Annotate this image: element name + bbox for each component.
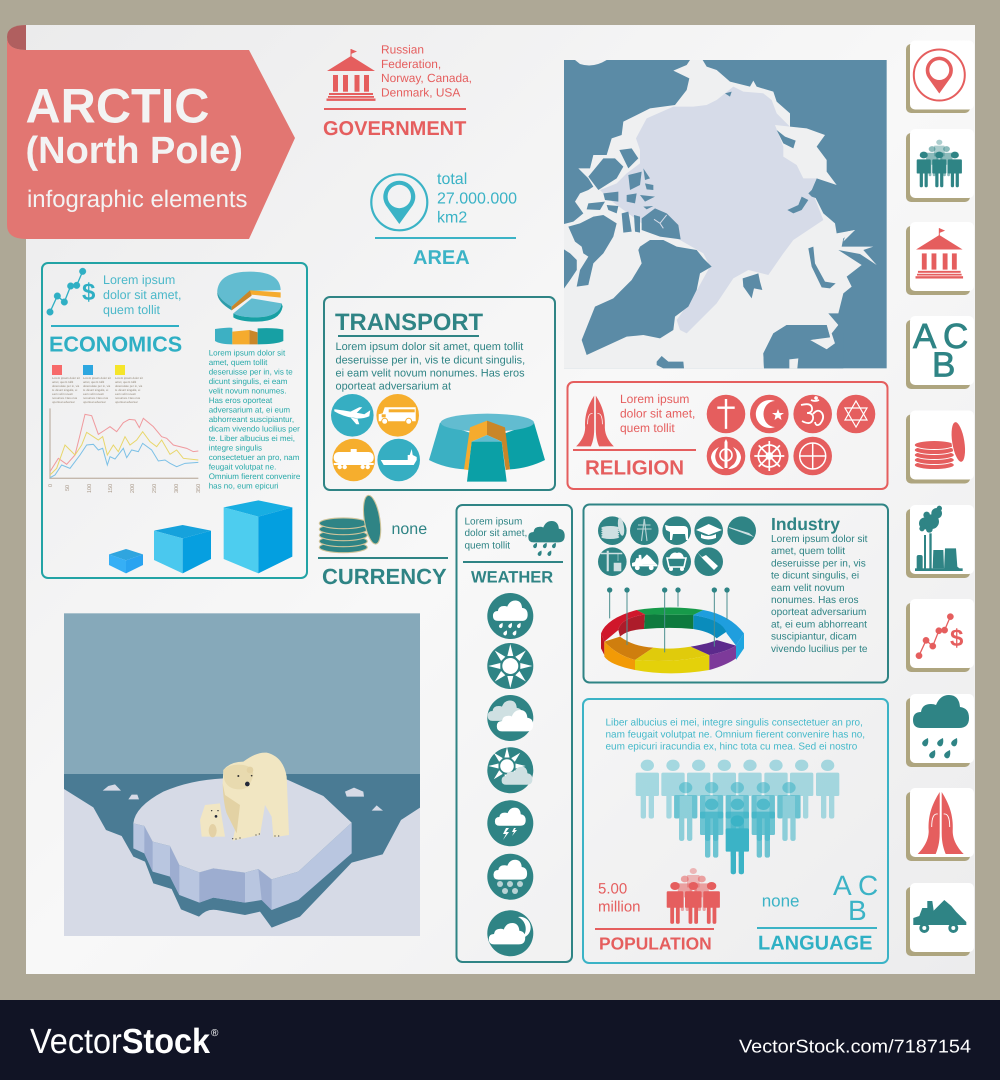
icon: coins bbox=[319, 494, 384, 553]
industry text: at, ei eum abhorreant bbox=[771, 620, 867, 630]
chart x-axis ticks: 300 bbox=[174, 484, 180, 493]
icon: language letters: C bbox=[858, 870, 878, 901]
chart legend: te dicunt singulis, ei bbox=[52, 388, 78, 392]
icon: rain bbox=[487, 593, 533, 639]
icon: rain cloud bbox=[528, 521, 565, 556]
transport text bbox=[336, 341, 525, 392]
area value bbox=[437, 171, 517, 227]
transport text: ei eam velit novum nonumes. Has eros bbox=[336, 367, 525, 379]
icon: hands tile bbox=[918, 792, 964, 854]
population text: eum epicuri iracundia ex, hinc tota cu mea. Sed ei nostro bbox=[606, 741, 858, 752]
image id: VectorStock.com/7187154 bbox=[739, 1036, 971, 1057]
title ribbon: (North Pole) bbox=[26, 130, 243, 172]
weather text: quem tollit bbox=[464, 540, 510, 551]
weather text bbox=[464, 516, 527, 551]
icon: rain tile bbox=[913, 695, 969, 758]
title ribbon: ARCTIC bbox=[26, 80, 209, 134]
icon: crane bbox=[598, 547, 627, 576]
population value: million bbox=[598, 899, 641, 916]
chart legend: eam velit novum bbox=[115, 392, 137, 396]
population value bbox=[598, 880, 641, 916]
chart x-axis ticks: 0 bbox=[48, 484, 54, 487]
economics body text: abhorreant suscipiantur, bbox=[209, 415, 294, 424]
tile shadows bbox=[906, 44, 970, 956]
icon: red crowd bbox=[667, 868, 720, 924]
chart legend: eam velit novum bbox=[83, 392, 105, 396]
economics body text: integre singulis bbox=[209, 444, 262, 453]
icon: bus bbox=[376, 394, 419, 437]
chart legend: deseruisse per in, vis bbox=[115, 384, 143, 388]
chart legend: nonumes. Has eros bbox=[115, 396, 141, 400]
area value: km2 bbox=[437, 210, 467, 227]
icon: letters tile: B bbox=[932, 346, 955, 385]
3d cubes bbox=[109, 500, 292, 573]
heading: religion: RELIGION bbox=[585, 456, 684, 479]
religion text bbox=[620, 392, 695, 435]
industry text: amet, quem tollit bbox=[771, 546, 845, 557]
icon: language letters bbox=[833, 870, 878, 926]
icon: tank wagon bbox=[332, 439, 375, 481]
economics body text: Has eros oporteat bbox=[209, 396, 273, 405]
tile faces bbox=[910, 40, 974, 952]
title ribbon: infographic elements bbox=[27, 186, 248, 213]
chart legend: Lorem ipsum dolor sit bbox=[52, 376, 80, 380]
heading: language: LANGUAGE bbox=[758, 932, 872, 954]
chart legend: Lorem ipsum dolor sit bbox=[83, 376, 111, 380]
heading: transport: TRANSPORT bbox=[335, 309, 484, 336]
industry text: vivendo lucilius per te bbox=[771, 644, 868, 655]
chart legend: eam velit novum bbox=[52, 392, 74, 396]
chart x-axis ticks: 50 bbox=[65, 485, 71, 491]
industry text: suscipiantur, dicam bbox=[771, 632, 857, 642]
icon: ship bbox=[377, 439, 420, 481]
economics body text: Lorem ipsum dolor sit bbox=[209, 349, 286, 358]
government countries text: Denmark, USA bbox=[381, 86, 460, 100]
economics body text: velit novum nonumes. bbox=[209, 387, 287, 396]
icon: growth tile: $ bbox=[950, 625, 964, 652]
icon: letters tile bbox=[913, 317, 968, 385]
icon: coins small bbox=[598, 516, 627, 545]
economics body text: te. Liber albucius ei mei, bbox=[209, 434, 295, 443]
panel: economics bbox=[42, 263, 307, 578]
side icon tiles bbox=[906, 40, 974, 956]
chart legend: oporteat adversar bbox=[52, 400, 75, 404]
government countries text: Russian bbox=[381, 42, 424, 56]
economics body text: dicunt singulis, ei eam bbox=[209, 377, 288, 386]
icon: people tile bbox=[917, 140, 962, 187]
icon: syringe bbox=[694, 547, 723, 576]
economics body text: adversarium at, ei eum bbox=[209, 406, 290, 415]
chart legend: te dicunt singulis, ei bbox=[83, 388, 109, 392]
economics body text: amet, quem tollit bbox=[209, 358, 268, 367]
industry text: Lorem ipsum dolor sit bbox=[771, 534, 868, 545]
icon: letters tile: C bbox=[943, 317, 968, 356]
chart legend: te dicunt singulis, ei bbox=[115, 388, 141, 392]
chart x-axis ticks bbox=[48, 484, 202, 493]
chart x-axis ticks: 200 bbox=[130, 484, 136, 493]
economics body text: consectetuer an pro, nam bbox=[209, 453, 300, 462]
icon: language letters: A bbox=[833, 870, 852, 901]
heading: government: GOVERNMENT bbox=[323, 118, 466, 140]
chart legend bbox=[52, 365, 143, 404]
brand logo: VectorStock bbox=[30, 1022, 210, 1061]
icon: letters tile: A bbox=[913, 317, 937, 356]
chart x-axis ticks: 350 bbox=[196, 484, 202, 493]
icon: dharma wheel bbox=[750, 437, 789, 475]
chart x-axis ticks: 250 bbox=[152, 484, 158, 493]
government countries text bbox=[381, 42, 472, 100]
economics body text: has no, eum epicuri bbox=[209, 482, 279, 491]
icon: sun bbox=[487, 643, 533, 689]
area value: total bbox=[437, 171, 467, 188]
chart x-axis ticks: 150 bbox=[108, 484, 114, 493]
icon: cow bbox=[662, 516, 691, 545]
area block bbox=[371, 171, 517, 269]
heading: industry: Industry bbox=[771, 514, 840, 534]
icon: truck tile bbox=[913, 900, 966, 933]
population text: Liber albucius ei mei, integre singulis consectetuer an pro, bbox=[606, 717, 863, 728]
icon: growth chart and dollar: $ bbox=[82, 279, 96, 306]
icon: cross bbox=[707, 395, 745, 433]
3d cylinder chart bbox=[429, 414, 545, 482]
polar bear illustration bbox=[64, 613, 420, 936]
language value: none bbox=[762, 892, 800, 911]
economics body text: Omnium fierent convenire bbox=[209, 472, 301, 481]
economics intro text bbox=[103, 273, 182, 317]
icon: polar bear with cub bbox=[200, 753, 289, 841]
economics body text bbox=[209, 349, 301, 491]
icon: rifle bbox=[727, 516, 756, 545]
pie chart bbox=[215, 272, 283, 344]
religion text: quem tollit bbox=[620, 421, 675, 435]
icon: factory tile bbox=[915, 506, 963, 571]
chart legend: nonumes. Has eros bbox=[83, 396, 109, 400]
industry text: eam velit novum bbox=[771, 583, 844, 594]
panel: religion bbox=[568, 382, 888, 489]
chart legend: oporteat adversar bbox=[115, 400, 138, 404]
government countries text: Norway, Canada, bbox=[381, 71, 472, 85]
area value: 27.000.000 bbox=[437, 190, 517, 208]
weather text: dolor sit amet, bbox=[464, 528, 527, 539]
chart legend: deseruisse per in, vis bbox=[52, 384, 80, 388]
transport text: Lorem ipsum dolor sit amet, quem tollit bbox=[336, 341, 523, 353]
icon: dump truck bbox=[630, 547, 659, 576]
icon: area pin bbox=[371, 174, 427, 230]
heading: currency: CURRENCY bbox=[322, 564, 447, 589]
donut chart bbox=[601, 587, 744, 673]
icon: location pin tile bbox=[914, 50, 965, 100]
people pyramid bbox=[636, 760, 839, 874]
icon: graduation cap bbox=[694, 516, 723, 545]
economics intro text: quem tollit bbox=[103, 303, 160, 317]
weather text: Lorem ipsum bbox=[464, 516, 522, 527]
government countries text: Federation, bbox=[381, 57, 441, 71]
industry text: deseruisse per in, vis bbox=[771, 558, 866, 570]
chart legend: oporteat adversar bbox=[83, 400, 106, 404]
chart x-axis ticks: 100 bbox=[87, 484, 93, 493]
economics intro text: dolor sit amet, bbox=[103, 288, 182, 302]
icon: government building bbox=[326, 49, 376, 101]
chart legend: amet, quem tollit bbox=[115, 380, 136, 384]
registered mark: ® bbox=[211, 1028, 219, 1039]
economics body text: feugait volutpat ne. bbox=[209, 463, 276, 472]
religion text: dolor sit amet, bbox=[620, 406, 695, 420]
title ribbon bbox=[7, 25, 295, 239]
economics body text: dicam vivendo lucilius per bbox=[209, 425, 300, 434]
chart legend: nonumes. Has eros bbox=[52, 396, 78, 400]
government block bbox=[323, 42, 472, 140]
heading: population: POPULATION bbox=[599, 933, 712, 953]
line chart bbox=[48, 408, 202, 493]
industry icons bbox=[598, 516, 756, 576]
chart legend: amet, quem tollit bbox=[83, 380, 104, 384]
currency value: none bbox=[392, 521, 427, 538]
icon: growth tile bbox=[916, 613, 964, 659]
icon: plane bbox=[331, 394, 374, 437]
icon: mine cart bbox=[662, 547, 691, 576]
icon: clouds bbox=[487, 695, 533, 741]
economics body text: deseruisse per in, vis te bbox=[209, 368, 293, 377]
heading: economics: ECONOMICS bbox=[49, 332, 182, 357]
bottom brand bar bbox=[0, 1000, 1000, 1080]
icon: khanda bbox=[707, 437, 745, 475]
icon: crescent and star bbox=[750, 395, 789, 433]
icon: moon and cloud bbox=[487, 910, 533, 956]
heading: area: AREA bbox=[413, 247, 470, 269]
chart legend: deseruisse per in, vis bbox=[83, 384, 111, 388]
economics intro text: Lorem ipsum bbox=[103, 273, 175, 287]
arctic map bbox=[564, 60, 887, 368]
icon: coins tile bbox=[914, 421, 968, 470]
population text: nam feugait volutpat ne. Omnium fierent convenire has no, bbox=[606, 729, 865, 740]
panel: weather bbox=[456, 505, 572, 962]
industry text: te dicunt singulis, ei bbox=[771, 570, 859, 582]
icon: sun and cloud bbox=[487, 747, 533, 793]
heading: weather: WEATHER bbox=[471, 568, 553, 586]
chart legend: Lorem ipsum dolor sit bbox=[115, 376, 143, 380]
transport text: oporteat adversarium at bbox=[336, 380, 451, 392]
panel: transport bbox=[324, 297, 555, 490]
icon: snow cloud bbox=[487, 854, 533, 900]
industry text: nonumes. Has eros bbox=[771, 595, 859, 606]
transport text: deseruisse per in, vis te dicunt singulis, bbox=[336, 354, 525, 366]
icon: praying hands bbox=[576, 396, 614, 446]
industry text: oporteat adversarium bbox=[771, 607, 866, 618]
chart legend: amet, quem tollit bbox=[52, 380, 73, 384]
panel: industry bbox=[584, 504, 888, 682]
icon: star of david bbox=[837, 395, 875, 433]
icon: power pylon bbox=[630, 516, 659, 545]
population value: 5.00 bbox=[598, 880, 627, 897]
panel: population and language bbox=[583, 699, 888, 963]
religion text: Lorem ipsum bbox=[620, 392, 689, 406]
icon: circle cross bbox=[793, 437, 832, 475]
population text bbox=[606, 717, 865, 752]
icon: language letters: B bbox=[848, 895, 867, 926]
icon: building tile bbox=[916, 228, 963, 279]
industry text bbox=[771, 534, 868, 655]
currency block bbox=[318, 494, 448, 589]
icon: growth chart and dollar bbox=[47, 268, 96, 315]
icon: om bbox=[793, 395, 832, 433]
icon: thunder cloud bbox=[487, 800, 533, 846]
